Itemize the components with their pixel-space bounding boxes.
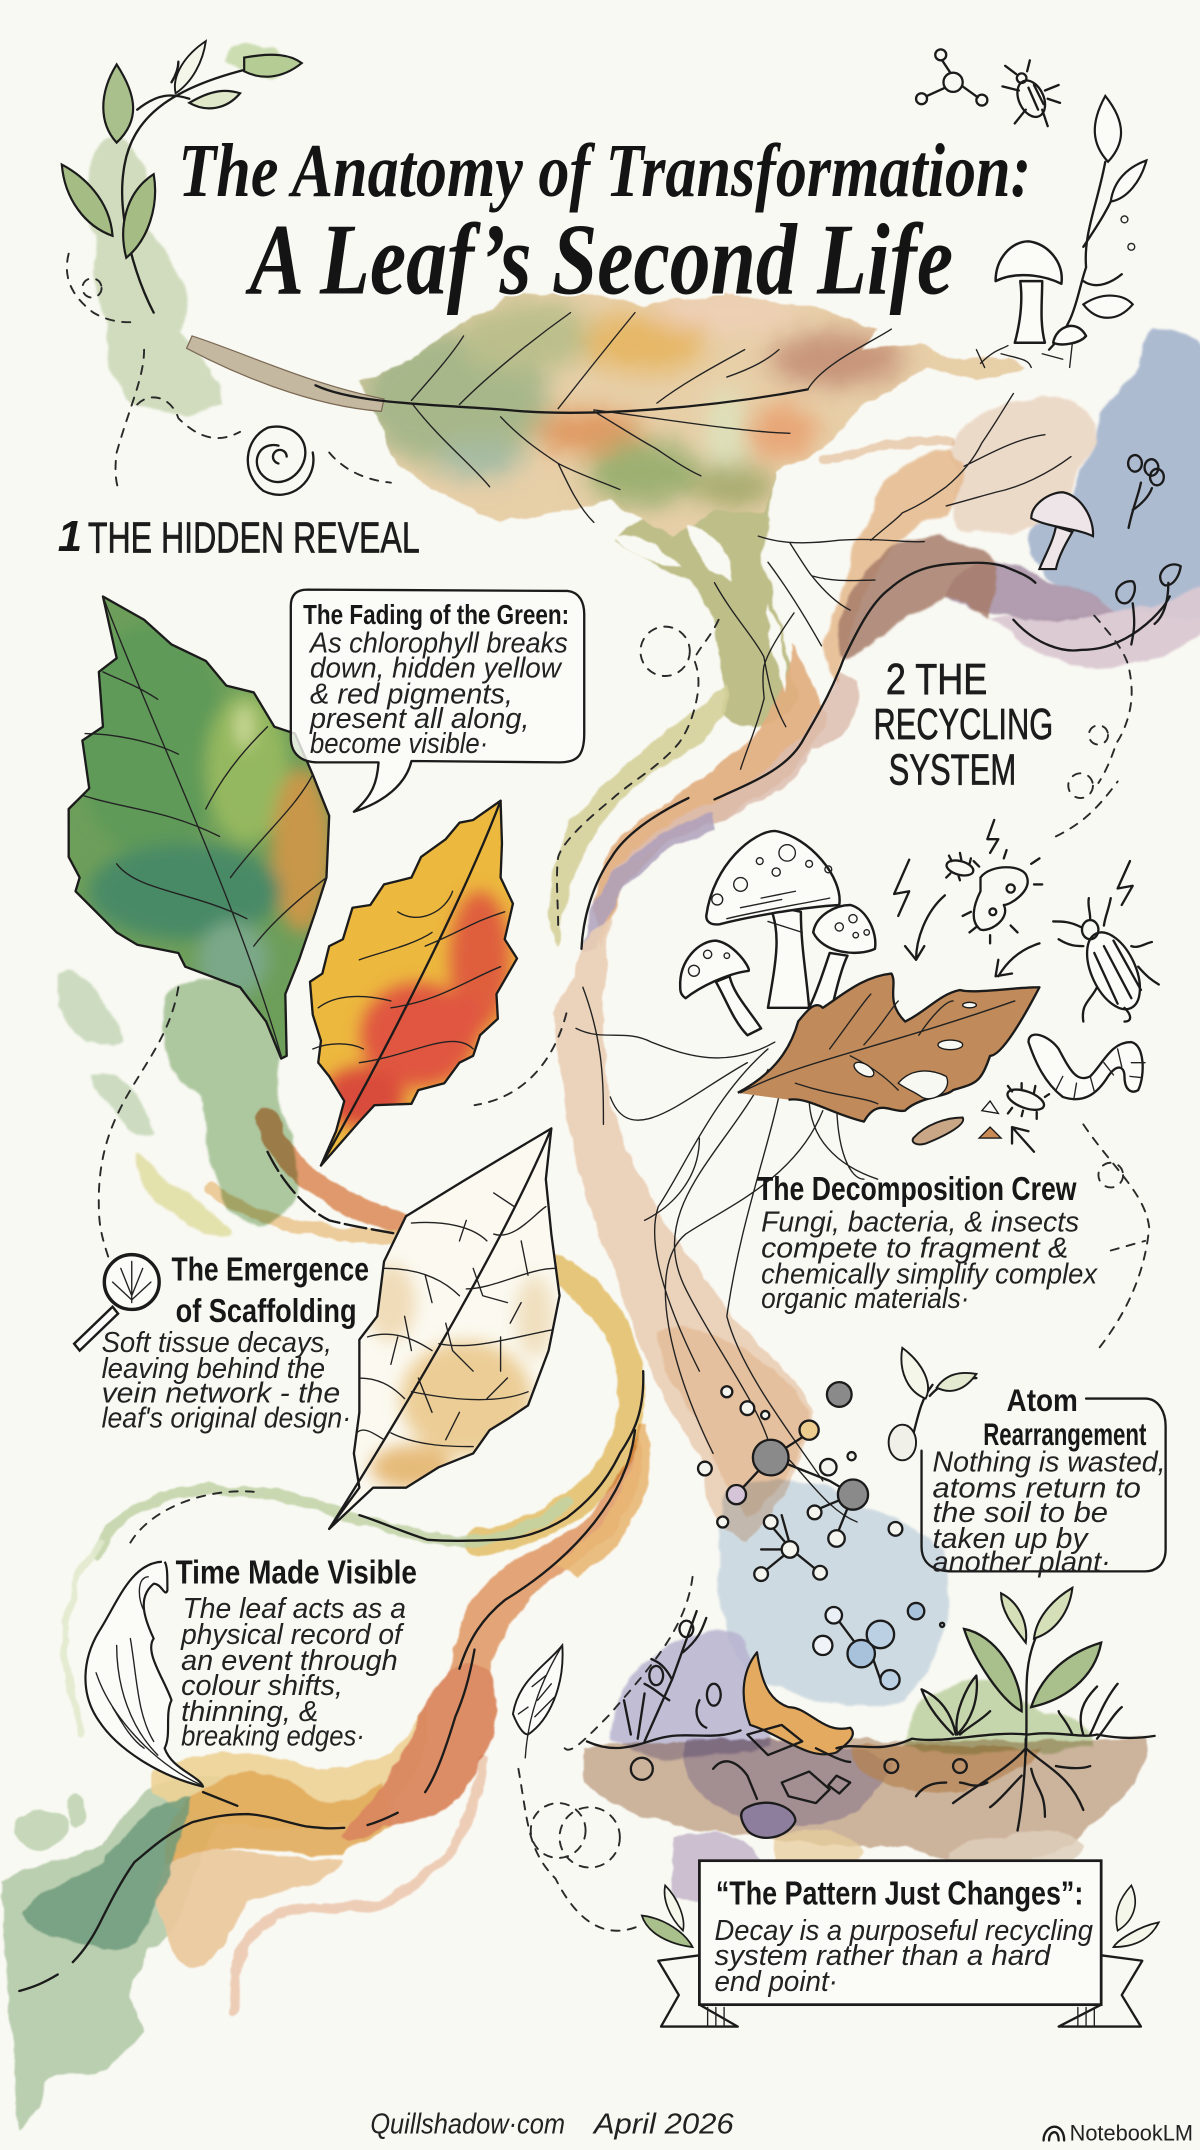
ribbon left — [658, 1955, 738, 2027]
panel: emergence of scaffolding: of Scaffolding — [176, 1292, 357, 1329]
ribbon right — [1059, 1955, 1142, 2027]
ground line — [587, 1730, 1155, 1748]
panel: time made visible: an event through — [181, 1645, 398, 1677]
footer credit: Quillshadow·com — [370, 2109, 565, 2141]
watercolor stream: trunk and central rivers — [550, 441, 949, 1543]
dashed trails — [99, 616, 1132, 1261]
sprig right — [1114, 1885, 1159, 1947]
icon: lightning bolts — [894, 820, 1133, 916]
section 1 heading: 1 — [58, 512, 82, 561]
section 2 heading: 2 THE — [886, 655, 987, 704]
footer credit: April 2026 — [592, 2109, 734, 2141]
icon: sprout seed — [889, 1348, 976, 1460]
young plant — [922, 1588, 1122, 1755]
icon: atom molecules cluster — [698, 1382, 902, 1581]
panel: decomposition crew text: Fungi, bacteria, & insects — [761, 1206, 1079, 1238]
icon: mushroom sprouts — [1128, 455, 1168, 644]
icon: molecule top right — [916, 49, 987, 106]
panel: decomposition crew text: compete to fragment & — [761, 1232, 1068, 1264]
yellow and red leaf — [302, 795, 528, 1172]
roots — [576, 987, 878, 1522]
icon: beetle top right — [1002, 60, 1060, 126]
panel: atom rearrangement: another plant· — [933, 1546, 1111, 1578]
notebooklm mark: NotebookLM — [1070, 2120, 1193, 2145]
watercolor wash: top left green — [84, 44, 286, 414]
watercolor wash: soil band — [583, 1739, 1148, 1906]
dashed trail to banner — [513, 1577, 693, 1931]
sprig left — [642, 1885, 693, 1947]
illustration: upper right mushrooms — [1031, 455, 1181, 644]
panel: atom rearrangement: the soil to be — [933, 1497, 1108, 1529]
icon: right mushroom — [809, 953, 847, 1012]
watercolor wash: green pool and orange flow left of centre — [58, 973, 297, 1235]
panel: time made visible: Time Made Visible — [176, 1554, 417, 1591]
skeleton leaf — [322, 1124, 569, 1536]
icon: small mushroom — [1039, 527, 1072, 569]
panel: decomposition crew text: chemically simplify complex — [761, 1258, 1099, 1290]
icon: arrows — [905, 895, 1039, 1152]
panel: emergence of scaffolding: The Emergence — [172, 1251, 369, 1288]
title: A Leaf’s Second Life — [245, 203, 953, 315]
watercolor wash: right blue, purple, peach wash — [823, 329, 1200, 686]
leaf stem — [187, 336, 384, 411]
watercolor wash: lower right blue, purple, green behind the soil — [610, 1480, 1097, 1757]
banner: the pattern just changes: system rather than a hard — [714, 1940, 1051, 1972]
soil pebbles — [631, 1725, 967, 1838]
panel: emergence of scaffolding: leaf's original design· — [102, 1402, 351, 1434]
watercolor river: lower left orange and green — [0, 1426, 650, 2129]
panel: emergence of scaffolding — [74, 1251, 369, 1434]
section 2 heading: SYSTEM — [889, 745, 1016, 794]
banner: the pattern just changes: “The Pattern Just Changes”: — [716, 1875, 1083, 1912]
icon: lower small mushrooms — [1116, 564, 1181, 603]
leaf veins — [315, 385, 808, 413]
icon: beetle — [1053, 898, 1159, 1022]
trunk holes and branch network — [581, 394, 1170, 949]
icon: top left sprig — [62, 41, 302, 313]
plant roots — [953, 1739, 1090, 1831]
icon: spiral — [248, 427, 313, 495]
icon: rod bacterium — [963, 850, 1042, 943]
section 2 heading: RECYCLING — [874, 700, 1053, 749]
panel: decomposition crew text: The Decomposition Crew — [757, 1170, 1077, 1207]
panel: time made visible: breaking edges· — [181, 1721, 365, 1753]
icon: magnifier — [74, 1255, 159, 1351]
panel: atom rearrangement: atoms return to — [933, 1472, 1141, 1504]
panel: time made visible: thinning, & — [181, 1696, 318, 1728]
illustration: large watercolor transition leaf — [186, 292, 1025, 537]
illustration: soil scene — [587, 1588, 1155, 1838]
section 2 heading — [874, 655, 1053, 794]
watercolor stream: thin pink trickle — [233, 1759, 486, 2009]
panel: atom rearrangement — [889, 1348, 1166, 1578]
footer credit — [370, 2109, 734, 2141]
icon: top right branch with leaves — [1049, 96, 1146, 350]
icon: title mushroom — [976, 241, 1086, 367]
icon: big mushroom — [768, 905, 809, 1008]
panel: time made visible: The leaf acts as a — [182, 1593, 406, 1625]
flow ink lines on rivers — [19, 1152, 643, 1991]
green leaf — [68, 595, 330, 1060]
title — [178, 128, 1031, 315]
panel: time made visible: physical record of — [180, 1619, 405, 1651]
speech bubble: the fading of the green — [291, 590, 584, 812]
banner: the pattern just changes: Decay is a purposeful recycling — [714, 1915, 1093, 1947]
banner: the pattern just changes: end point· — [714, 1966, 838, 1998]
icon: worm — [1028, 1035, 1143, 1099]
decorative swirl and dotted trails top left — [67, 254, 391, 495]
speech bubble: the fading of the green: become visible· — [310, 728, 488, 760]
icon: left mushroom — [716, 976, 761, 1035]
panel: decomposition crew text — [757, 1170, 1099, 1315]
icon: small bacterium — [1005, 1083, 1049, 1119]
icon: debris — [913, 1118, 963, 1144]
watercolor stream: orange flow into skeleton leaf — [213, 1118, 405, 1238]
panel: atom rearrangement: taken up by — [933, 1523, 1089, 1555]
icon: decaying brown leaf — [738, 974, 1039, 1122]
icon: small skeleton leaf — [513, 1645, 563, 1758]
panel: emergence of scaffolding: Soft tissue decays, — [102, 1327, 332, 1359]
panel: emergence of scaffolding: leaving behind the — [102, 1353, 325, 1385]
dashed trail right of decomposition — [1083, 1124, 1149, 1351]
section 1 heading: THE HIDDEN REVEAL — [88, 514, 420, 563]
panel: emergence of scaffolding: vein network - the — [102, 1378, 340, 1410]
panel: time made visible — [85, 1554, 417, 1787]
watercolor stream: yellow swirl and green arc — [66, 1268, 632, 1735]
speech bubble: the fading of the green: As chlorophyll breaks — [308, 628, 568, 660]
panel: atom rearrangement: Nothing is wasted, — [933, 1446, 1166, 1478]
speech bubble: the fading of the green: & red pigments, — [310, 678, 513, 710]
panel: time made visible: colour shifts, — [181, 1670, 343, 1702]
blue molecule — [813, 1603, 944, 1689]
section 1 heading — [58, 512, 420, 563]
speech bubble: the fading of the green: down, hidden yellow — [310, 652, 563, 684]
illustration: decomposition crew — [576, 820, 1159, 1522]
orange fallen leaf — [744, 1652, 853, 1754]
panel: atom rearrangement: Atom — [1007, 1382, 1078, 1418]
wildflower stems — [624, 1611, 721, 1741]
banner: the pattern just changes — [642, 1861, 1159, 2027]
panel: decomposition crew text: organic materials· — [761, 1283, 970, 1315]
speech bubble: the fading of the green: The Fading of the Green: — [303, 599, 569, 630]
icon: curled dry leaf — [85, 1562, 203, 1787]
paper gaps in trunk — [616, 523, 786, 692]
banner box — [699, 1861, 1101, 2005]
speech bubble: the fading of the green: present all along, — [309, 703, 529, 735]
